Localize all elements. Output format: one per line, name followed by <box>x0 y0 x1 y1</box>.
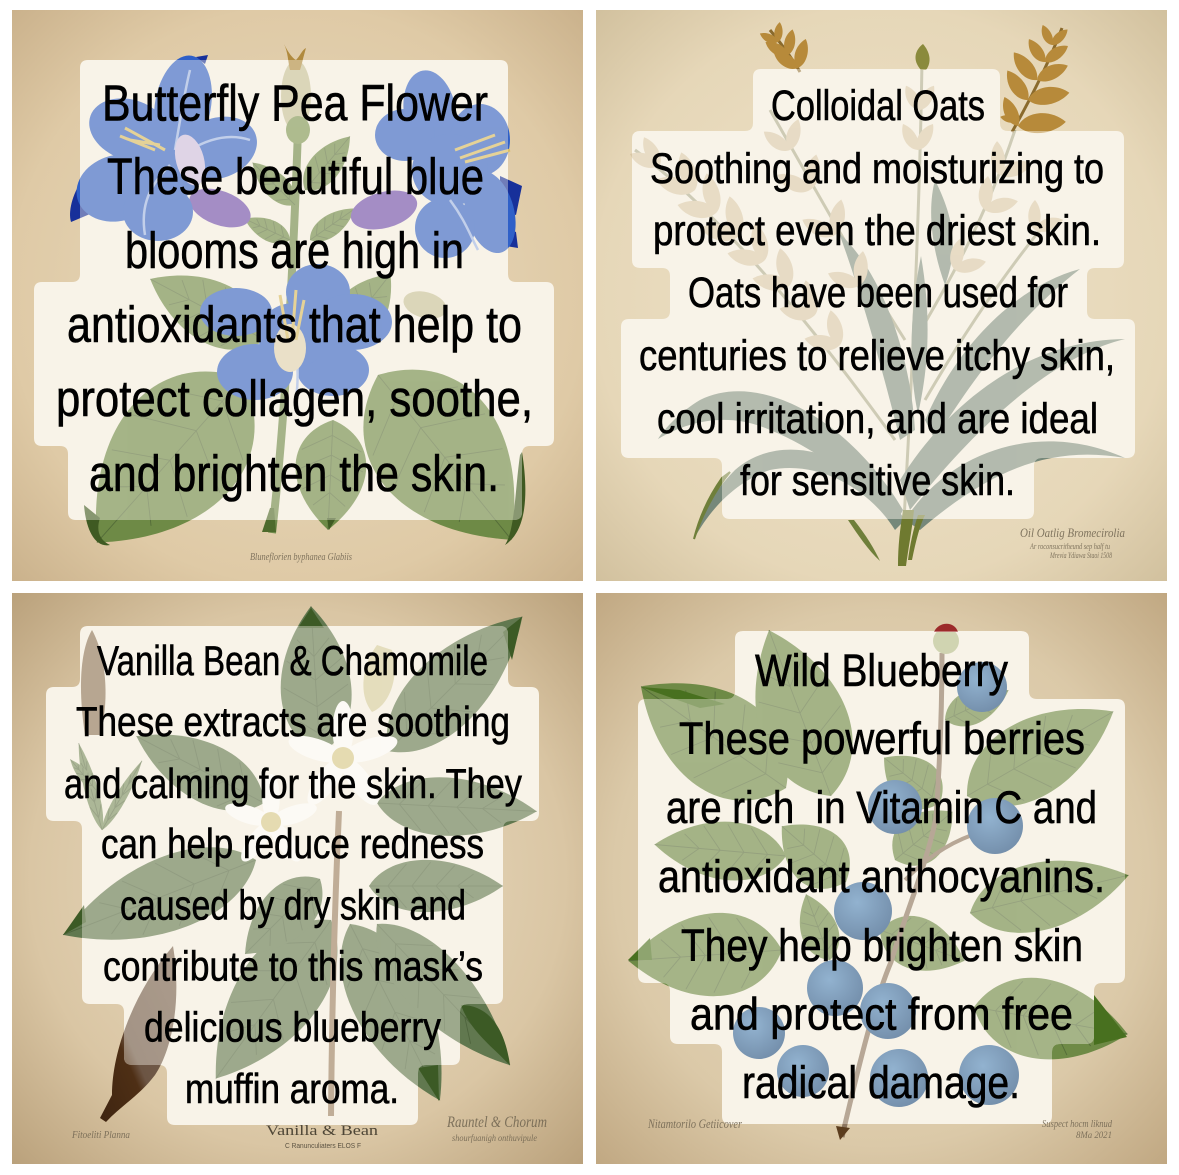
signature: Bluneflorien byphanea Glabiis <box>250 551 352 563</box>
petal highlights <box>144 70 478 398</box>
body <box>56 148 533 502</box>
body: and brighten the skin. <box>89 445 499 502</box>
purple flower tubes <box>184 181 422 236</box>
heading: Butterfly Pea Flower <box>102 74 488 132</box>
body <box>639 145 1115 505</box>
panel background <box>12 593 583 1164</box>
panel: wild blueberry <box>596 593 1167 1164</box>
body: radical damage. <box>742 1057 1020 1108</box>
body: are rich in Vitamin C and <box>666 782 1097 833</box>
body: These powerful berries <box>679 713 1085 764</box>
washed illustration under backdrop <box>80 60 522 520</box>
panel: butterfly pea flower <box>12 10 583 585</box>
plate captions: Suspect hocm liknud <box>1042 1119 1113 1130</box>
body: protect collagen, soothe, <box>56 370 533 427</box>
body: These extracts are soothing <box>76 698 510 745</box>
plate captions: 8Ma 2021 <box>1076 1130 1112 1140</box>
body: blooms are high in <box>125 222 464 279</box>
text backdrop <box>46 626 539 1125</box>
text block <box>56 74 533 502</box>
panel background <box>596 10 1167 581</box>
heading: Colloidal Oats <box>771 82 985 130</box>
body: They help brighten skin <box>681 920 1083 971</box>
signature <box>1020 525 1125 560</box>
body <box>658 713 1105 1108</box>
plate captions: Nitamtorilo Getiicover <box>647 1116 743 1131</box>
body: antioxidant anthocyanins. <box>658 851 1105 902</box>
blue flowers <box>69 51 524 400</box>
heading: Wild Blueberry <box>755 645 1008 696</box>
washed illustration under backdrop <box>638 631 1125 1124</box>
illustration: oat plant <box>627 22 1125 566</box>
plate captions <box>647 1116 1113 1140</box>
washed illustration under backdrop <box>632 69 1125 519</box>
panel: vanilla bean and chamomile <box>12 592 583 1164</box>
plate captions: shourfuanigh onthuvipule <box>452 1133 537 1143</box>
body: and calming for the skin. They <box>64 760 522 807</box>
washed illustration under backdrop <box>70 626 537 1116</box>
body: delicious blueberry <box>144 1004 441 1050</box>
signature: Mrevia Ydiawa Staoi 1508 <box>1049 551 1112 560</box>
body: can help reduce redness <box>101 820 484 867</box>
body: Soothing and moisturizing to <box>650 145 1104 193</box>
plate captions: Fitoeliti Planna <box>71 1130 130 1141</box>
body: cool irritation, and are ideal <box>657 395 1098 443</box>
body: protect even the driest skin. <box>653 207 1101 255</box>
illustration: butterfly pea plant <box>49 44 562 585</box>
text block <box>658 645 1105 1108</box>
body <box>64 698 522 1112</box>
signature: Ar roconsucritheund sep half tu <box>1029 542 1110 551</box>
illustration: blueberry branch <box>613 615 1136 1140</box>
body: contribute to this mask’s <box>103 942 483 990</box>
body: muffin aroma. <box>185 1065 399 1112</box>
plate captions: Vanilla & Bean <box>266 1123 379 1139</box>
body: and protect from free <box>690 988 1073 1040</box>
illustration: vanilla plant <box>50 592 547 1122</box>
text block <box>64 637 522 1112</box>
heading: Vanilla Bean & Chamomile <box>97 637 488 684</box>
plate captions: C Ranunculiaters ELOS F <box>285 1141 361 1150</box>
body: for sensitive skin. <box>740 457 1015 505</box>
panel: colloidal oats <box>596 10 1167 581</box>
body: antioxidants that help to <box>67 296 522 353</box>
panel background <box>12 10 583 581</box>
text backdrop <box>34 60 554 520</box>
body: Oats have been used for <box>688 269 1068 317</box>
text backdrop <box>621 69 1135 519</box>
plate captions: Rauntel & Chorum <box>446 1114 547 1131</box>
text backdrop <box>638 631 1125 1124</box>
dark petal edges <box>70 55 522 248</box>
signature: Oil Oatlig Bromecirolia <box>1020 525 1125 540</box>
body: caused by dry skin and <box>120 882 466 928</box>
panel background <box>596 593 1167 1164</box>
plate captions <box>71 1114 547 1150</box>
text block <box>639 82 1115 505</box>
body: These beautiful blue <box>107 148 484 205</box>
